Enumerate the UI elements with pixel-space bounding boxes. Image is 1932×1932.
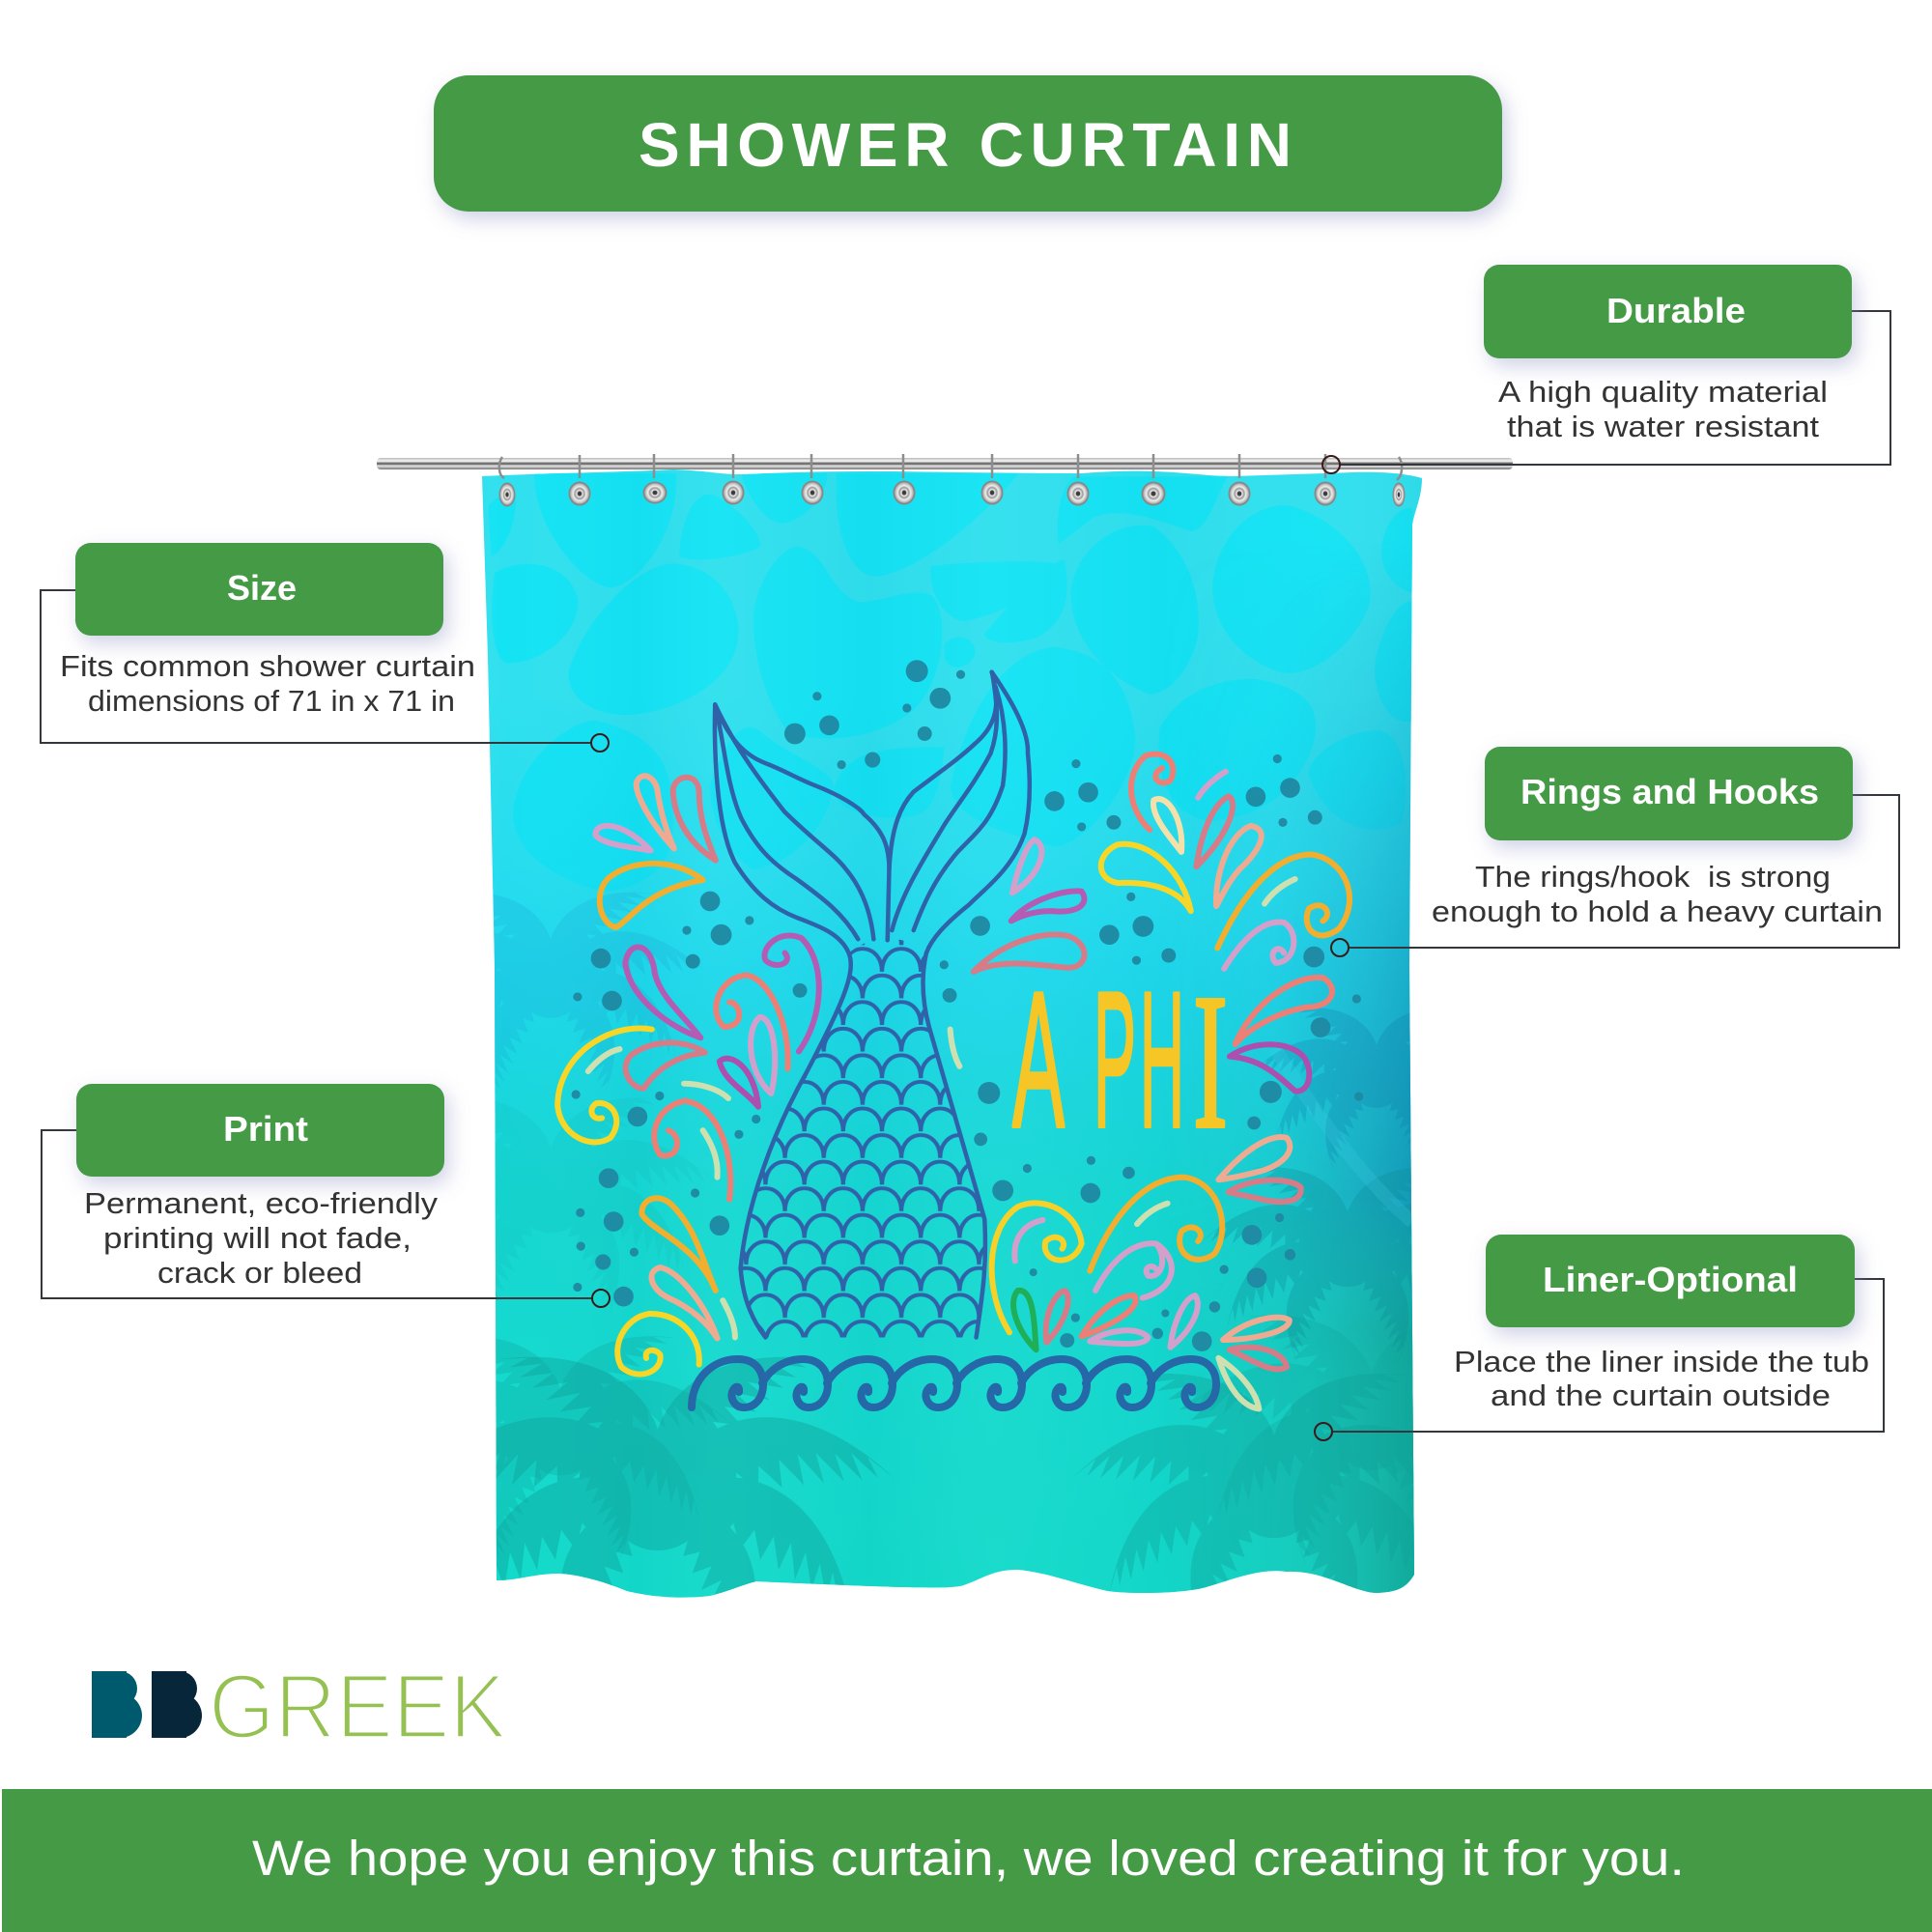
callout: durable	[1322, 265, 1890, 473]
coloured splash swirls	[557, 754, 1350, 1408]
greek letters: A	[1012, 952, 1065, 1168]
mermaid tail artwork	[557, 660, 1363, 1408]
light band	[1275, 1048, 1412, 1222]
tail outline	[715, 672, 1030, 1337]
callout: size	[41, 543, 609, 752]
footer banner: We hope you enjoy this curtain, we loved creating it for you.	[252, 1831, 1685, 1886]
wave border	[692, 1359, 1216, 1407]
footer banner	[2, 1789, 1932, 1932]
bubbles	[572, 660, 1363, 1351]
logo: BB Greek: B	[152, 1656, 200, 1758]
callout: rings and hooks	[1331, 747, 1899, 956]
callout: durable: that is water resistant	[1507, 410, 1819, 443]
shower curtain product illustration	[377, 454, 1560, 1671]
callout: rings and hooks: The rings/hook is strong	[1475, 860, 1831, 894]
callout: liner optional: Liner-Optional	[1543, 1260, 1798, 1299]
callout: durable: Durable	[1606, 291, 1746, 330]
callout: size: dimensions of 71 in x 71 in	[88, 684, 455, 718]
greek letters: H	[1140, 952, 1184, 1168]
callout: liner optional	[1315, 1235, 1884, 1440]
callout: print	[42, 1084, 610, 1307]
tail scales	[742, 939, 983, 1337]
greek letters	[1012, 952, 1228, 1169]
callout: print: Print	[223, 1109, 308, 1149]
greek letters: P	[1094, 952, 1136, 1168]
curtain fabric	[482, 469, 1422, 1598]
title banner: SHOWER CURTAIN	[639, 110, 1292, 180]
callout: print: crack or bleed	[157, 1256, 362, 1290]
logo: BB Greek: GREEK	[209, 1656, 506, 1758]
greek letters: I	[1193, 955, 1228, 1169]
callout: rings and hooks: enough to hold a heavy curtain	[1432, 895, 1883, 928]
callout: durable: A high quality material	[1498, 375, 1828, 409]
callout: print: printing will not fade,	[103, 1221, 412, 1255]
callout: liner optional: and the curtain outside	[1491, 1378, 1831, 1412]
callout: size: Size	[227, 568, 297, 608]
palm silhouettes	[385, 859, 1560, 1671]
rings and grommets	[499, 454, 1405, 506]
callout: size: Fits common shower curtain	[60, 649, 475, 683]
title banner	[434, 75, 1502, 212]
logo: BB Greek: B	[92, 1656, 140, 1758]
callout: rings and hooks: Rings and Hooks	[1520, 772, 1819, 811]
callout: print: Permanent, eco-friendly	[84, 1186, 439, 1220]
curtain rod	[377, 458, 1513, 469]
logo: BB Greek	[92, 1656, 506, 1758]
callout: liner optional: Place the liner inside the tub	[1454, 1345, 1869, 1378]
